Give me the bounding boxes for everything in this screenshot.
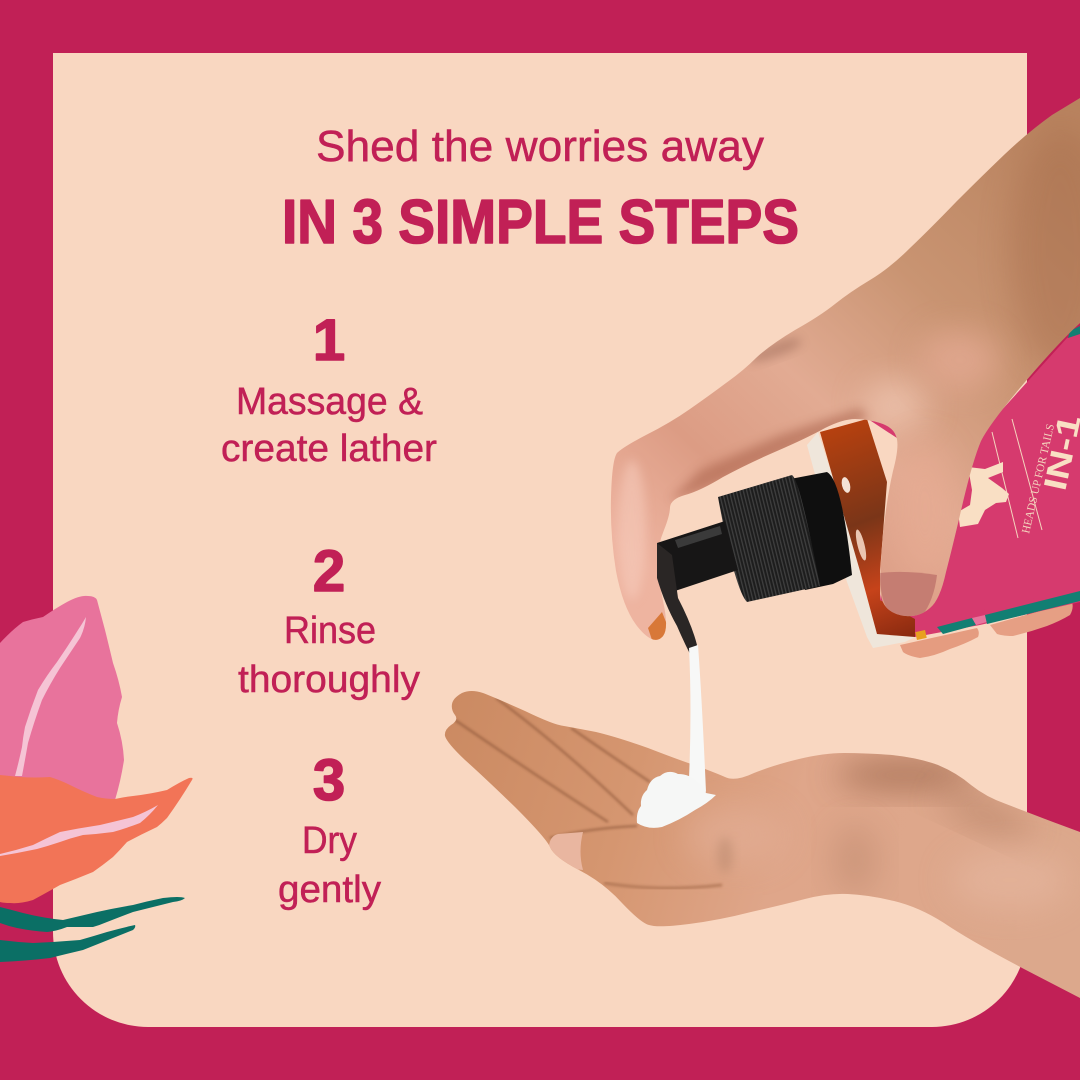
fingers behind bottle [900, 602, 1073, 658]
teal blade upper [0, 897, 185, 932]
pink leaf vein [15, 617, 86, 776]
orange leaf vein [0, 805, 158, 856]
pump stem [657, 521, 738, 591]
step 3: 3 [313, 748, 345, 813]
pump neck [785, 472, 852, 590]
brand name: HEADS UP FOR TAILS [1020, 423, 1057, 535]
heading: intro line: Shed the worries away [316, 122, 764, 171]
photo: bottle held in hand [430, 90, 1080, 1010]
step 1 [221, 308, 437, 470]
pink leaf [0, 596, 124, 800]
step 1: Massage & [236, 381, 423, 423]
step 1: 1 [313, 308, 345, 373]
lower hand [430, 680, 1080, 1010]
amber bottle base [820, 419, 915, 637]
stem highlight [675, 526, 722, 548]
step 3: gently [278, 869, 381, 911]
finger creases [455, 698, 650, 838]
logo: dogs [958, 462, 1009, 527]
step 2: 2 [313, 539, 345, 604]
pump [657, 472, 852, 654]
orange leaf [0, 775, 193, 903]
foam [637, 772, 716, 828]
brand lines [992, 419, 1042, 538]
label band [915, 588, 1080, 634]
bottle rim [807, 432, 915, 648]
illustration: leaves [0, 596, 193, 962]
step 3: Dry [302, 820, 357, 862]
lower palm crease [604, 883, 722, 888]
step 2: thoroughly [238, 659, 420, 701]
step 2 [238, 539, 420, 701]
bottle label [868, 326, 1080, 640]
thumb nail [549, 832, 583, 870]
step 2: Rinse [284, 610, 376, 652]
index fingernail [648, 612, 666, 640]
nozzle [657, 543, 697, 654]
upper hand [600, 90, 1080, 660]
stream [689, 645, 706, 792]
teal blade lower [0, 925, 135, 962]
ribbed cap [718, 475, 820, 602]
step 1: create lather [221, 428, 437, 470]
thumb nail [880, 572, 937, 618]
foam and product stream [637, 645, 716, 828]
heading: main title: IN 3 SIMPLE STEPS [282, 188, 799, 257]
step 3 [278, 748, 381, 911]
